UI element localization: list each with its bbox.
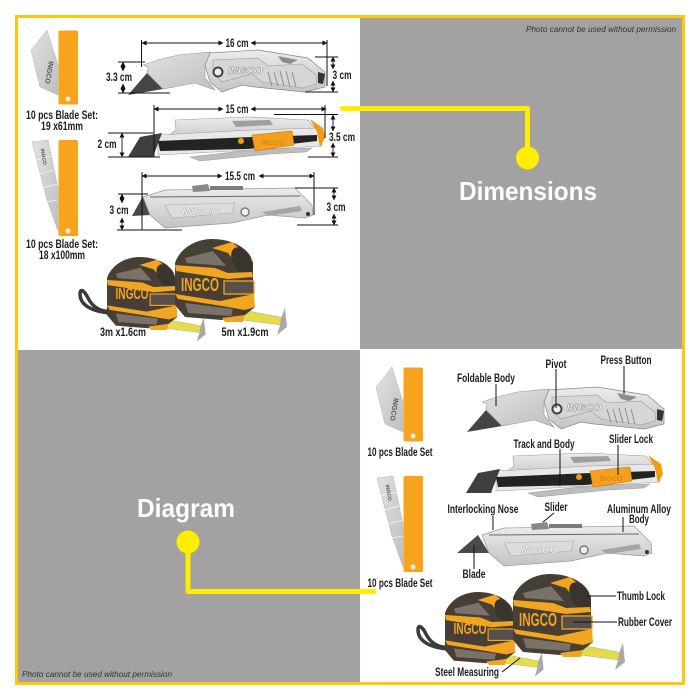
foldable knife callouts: Pivot	[546, 359, 567, 371]
blade set one: INGCO	[388, 397, 399, 422]
tape measures callouts: INGCO	[519, 610, 557, 630]
copyright note top: Photo cannot be used without permission	[526, 25, 677, 34]
retractable knife with dimensions: 3 cm	[326, 202, 346, 214]
retractable knife callouts: Slider	[544, 502, 568, 514]
retractable knife callouts: Blade	[462, 569, 486, 581]
connector: dimensions	[342, 108, 539, 170]
tape measures with sizes: INGCO	[181, 275, 219, 295]
retractable knife callouts: Aluminum Alloy	[607, 504, 671, 516]
blade set 19x61	[26, 30, 98, 133]
snap-off knife with dimensions: 3.5 cm	[329, 132, 355, 144]
retractable knife callouts	[448, 502, 671, 581]
retractable knife callouts: Body	[629, 514, 649, 526]
snap-off knife callouts	[466, 434, 663, 497]
tape measures callouts: INGCO	[454, 621, 486, 638]
blade set 18x100	[26, 140, 98, 262]
foldable knife callouts: INGCO	[566, 403, 602, 414]
foldable knife with dimensions	[106, 38, 352, 95]
blade set 19x61: 19 x61mm	[41, 121, 83, 133]
snap-off knife callouts: INGCO	[600, 476, 623, 483]
foldable knife callouts: Press Button	[600, 355, 652, 367]
heading: Diagram: Diagram	[137, 493, 235, 523]
foldable knife with dimensions: 3 cm	[332, 70, 352, 82]
panel: dimensions product views	[26, 30, 355, 342]
blade set two	[368, 476, 433, 590]
blade set 19x61: 10 pcs Blade Set:	[26, 110, 98, 122]
tape measures callouts	[418, 574, 672, 679]
blade set two: 10 pcs Blade Set	[368, 578, 433, 590]
blade set one: 10 pcs Blade Set	[368, 447, 433, 459]
snap-off knife with dimensions: 2 cm	[98, 139, 116, 151]
tape measures with sizes: 3m x1.6cm	[100, 327, 146, 339]
foldable knife callouts: Foldable Body	[457, 373, 515, 385]
tape measures with sizes: 5m x1.9cm	[222, 327, 268, 339]
retractable knife callouts: INGCO	[521, 545, 559, 556]
blade set 18x100: 18 x100mm	[39, 250, 85, 262]
retractable knife with dimensions: 15.5 cm	[225, 171, 255, 183]
copyright note bottom: Photo cannot be used without permission	[22, 670, 173, 679]
retractable knife with dimensions	[110, 171, 346, 230]
connector: diagram	[176, 530, 374, 592]
tape measures callouts: Rubber Cover	[618, 617, 672, 629]
snap-off knife callouts: Track and Body	[514, 439, 575, 451]
foldable knife with dimensions: 16 cm	[226, 38, 248, 50]
foldable knife callouts	[457, 355, 664, 432]
panel: dimensions background	[360, 18, 682, 349]
retractable knife callouts: Interlocking Nose	[448, 504, 518, 516]
blade set 18x100: 10 pcs Blade Set:	[26, 239, 98, 251]
blade set two: INGCO	[384, 484, 392, 502]
panel: diagram product views	[368, 355, 672, 679]
snap-off knife callouts: Slider Lock	[609, 434, 653, 446]
blade set 18x100: INGCO	[39, 148, 47, 166]
tape measures callouts: Steel Measuring	[435, 667, 499, 679]
tape measures callouts: Thumb Lock	[617, 591, 665, 603]
blade set one	[368, 367, 433, 459]
snap-off knife with dimensions: INGCO	[262, 140, 285, 147]
foldable knife with dimensions: 3.3 cm	[106, 72, 132, 84]
panel: diagram background	[18, 350, 360, 682]
blade set 19x61: INGCO	[43, 60, 54, 85]
retractable knife with dimensions: 3 cm	[110, 205, 128, 217]
snap-off knife with dimensions: 15 cm	[226, 104, 248, 116]
tape measures with sizes	[80, 239, 287, 342]
foldable knife with dimensions: INGCO	[228, 66, 263, 77]
retractable knife with dimensions: INGCO	[182, 207, 220, 218]
snap-off knife with dimensions	[98, 104, 355, 161]
heading: Dimensions: Dimensions	[459, 176, 597, 206]
tape measures with sizes: INGCO	[116, 286, 148, 303]
